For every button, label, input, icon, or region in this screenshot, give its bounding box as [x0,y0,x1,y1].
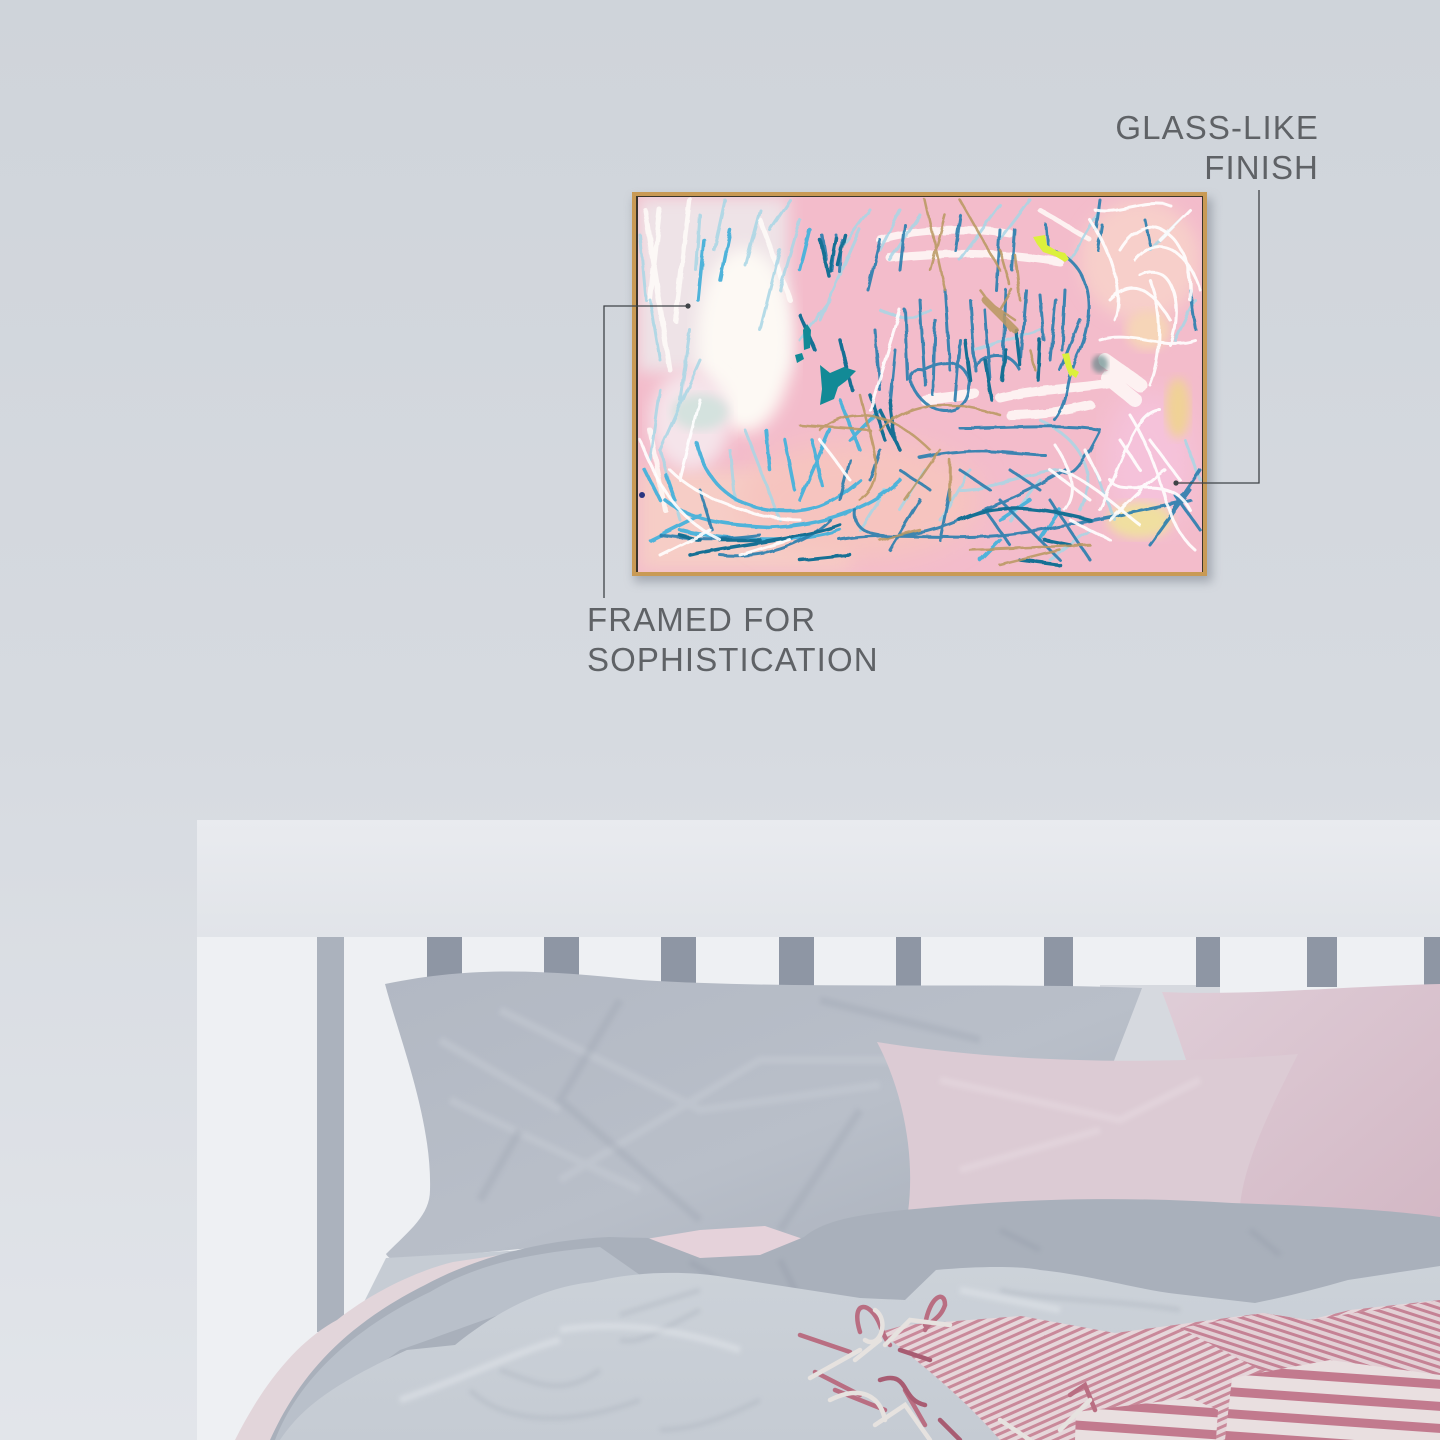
duvet: folded darker band [270,1199,1440,1440]
artwork [638,197,1202,572]
pillow: small pink front [877,1042,1298,1212]
callout: framed for sophistication: SOPHISTICATION [587,641,879,678]
sheet: under-sheet and pink edge [235,1226,806,1440]
callout: glass-like finish: FINISH [1204,149,1319,186]
callout: framed for sophistication: FRAMED FOR [587,601,816,638]
painting [632,192,1212,582]
frame [632,192,1207,576]
throw fringe [800,1297,1095,1440]
painting: gold strokes [800,200,1090,565]
painting: teal splash [795,324,856,405]
painting shadow [634,198,1212,582]
pillow: back pink right [1162,984,1440,1220]
painting: cyan strokes [645,230,1060,560]
painting: deep teal strokes [680,235,1090,565]
painting: pale blue strokes [640,200,1200,560]
painting: lime splatter [1033,235,1079,378]
callout: glass-like finish: GLASS-LIKE [1115,109,1319,146]
callout: glass-like finish [1115,109,1319,486]
pillow: large grey [385,971,1142,1261]
painting: white brush strokes [645,200,1140,510]
throw blanket: striped [800,1297,1440,1440]
duvet: light bedding [280,1266,1440,1440]
callout: framed for sophistication [587,303,879,678]
painting: navy speck [639,492,645,498]
painting: dark blue strokes [660,200,1200,560]
painting: white loops [640,204,1200,555]
painting: dark splash [1092,355,1108,373]
headboard [197,820,1440,1440]
